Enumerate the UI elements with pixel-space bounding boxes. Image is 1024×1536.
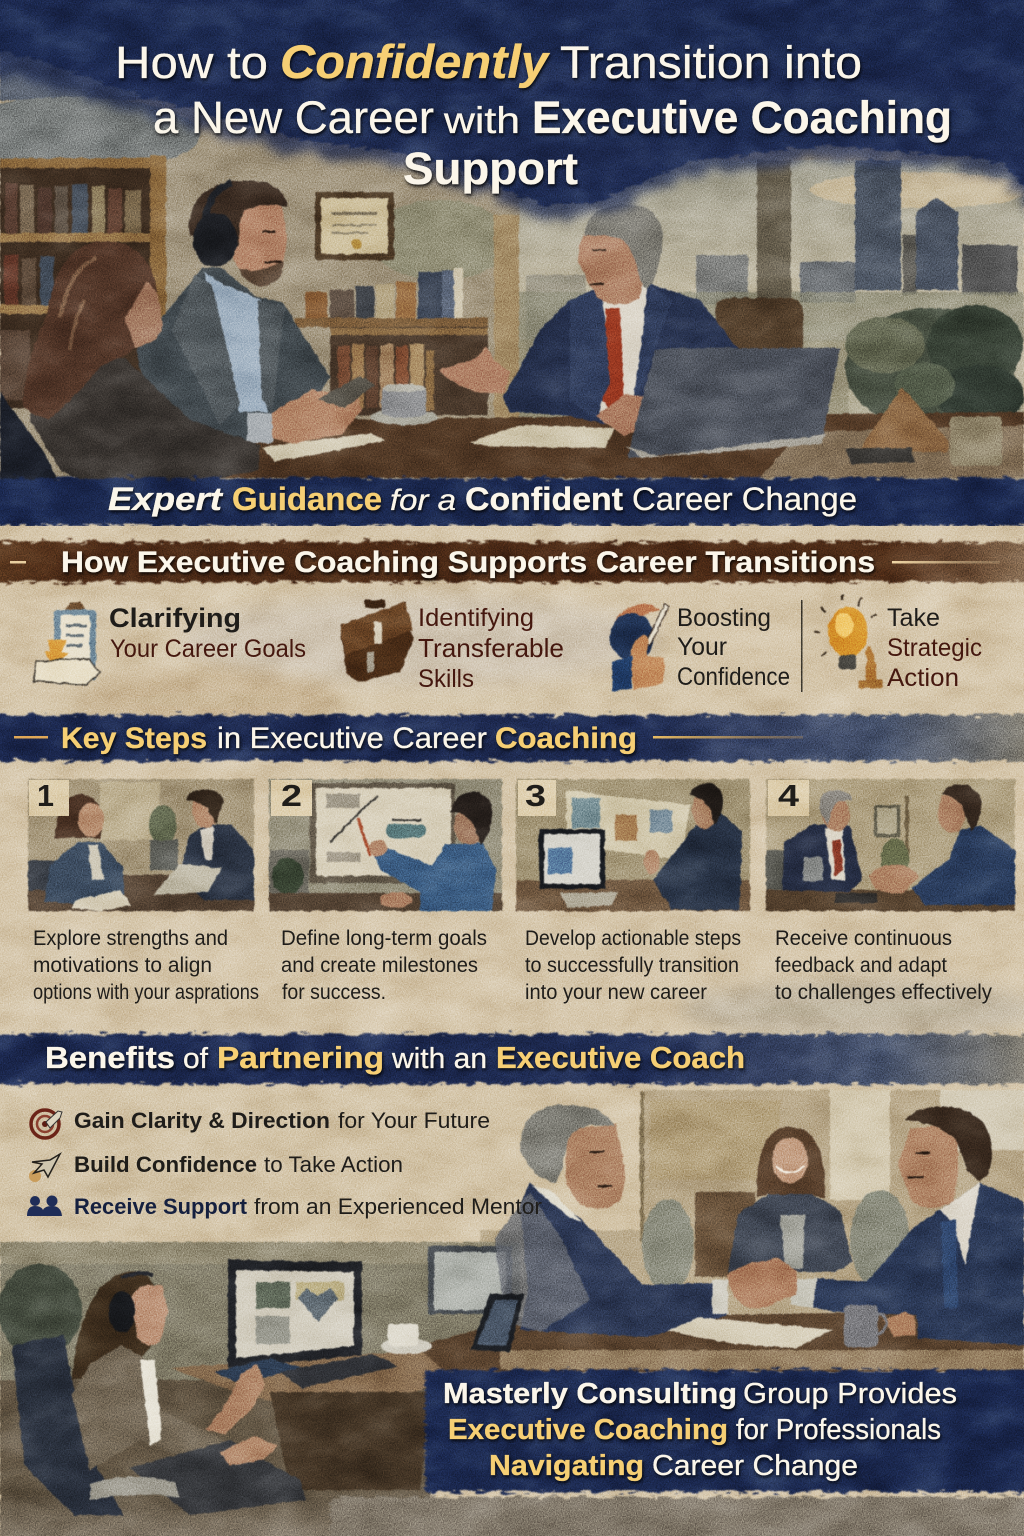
young man in navy suit xyxy=(790,1107,1024,1345)
benefits parchment xyxy=(0,1090,1024,1240)
heading: key steps: Coaching xyxy=(495,722,637,755)
step numbers: 1 xyxy=(37,778,54,813)
hero certificate xyxy=(315,192,394,260)
heading: benefits: of xyxy=(183,1043,209,1075)
hero chair xyxy=(715,298,803,363)
step numbers: 3 xyxy=(525,778,546,813)
hero navy top wash, soft edge xyxy=(0,0,1024,255)
hero wall bookcase xyxy=(295,268,488,415)
support item: take action: Take xyxy=(887,604,940,632)
support item: clarifying xyxy=(109,603,306,663)
title: with xyxy=(443,100,520,141)
benefit 1 xyxy=(31,1108,490,1138)
title xyxy=(115,35,952,194)
header band: coaching supports xyxy=(0,542,1024,582)
older man shaking hands xyxy=(495,1105,728,1337)
hero lower navy band xyxy=(0,478,1024,526)
heading: benefits: Executive Coach xyxy=(496,1040,745,1075)
handshake xyxy=(727,1257,797,1308)
title: a New Career xyxy=(153,92,434,143)
support item: boosting xyxy=(677,604,790,691)
hero navy top wash xyxy=(0,0,1024,240)
step 4 text: feedback and adapt xyxy=(775,954,947,977)
closing statement: Executive Coaching xyxy=(448,1414,728,1446)
benefit 1: for Your Future xyxy=(338,1108,490,1133)
benefits meeting scene xyxy=(0,1090,1024,1536)
hero plant xyxy=(845,305,1024,428)
support item: identifying: Skills xyxy=(418,665,474,693)
hero window and skyline xyxy=(519,158,1024,470)
hero subtitle: Confident xyxy=(465,481,623,517)
icon: light bulb and chess piece xyxy=(814,594,882,688)
support item: clarifying: Clarifying xyxy=(109,603,241,633)
meeting papers and mug xyxy=(667,1305,886,1348)
benefit 3 xyxy=(27,1194,542,1219)
closing statement: Masterly Consulting xyxy=(443,1378,737,1410)
hero subtitle: for a xyxy=(390,484,456,517)
icon: clipboard goals xyxy=(34,602,100,685)
step number tile 4 xyxy=(768,780,809,816)
hero desk papers and cup xyxy=(262,384,615,462)
closing navy panel xyxy=(425,1370,1024,1492)
woman seen from behind xyxy=(0,241,260,500)
step 2 text: and create milestones xyxy=(281,954,478,977)
title: Executive Coaching xyxy=(532,92,952,143)
heading: benefits xyxy=(45,1040,745,1075)
step 1 text: options with your asprations xyxy=(33,981,259,1004)
step 2 text: for success. xyxy=(282,981,386,1004)
step 3 text: into your new career xyxy=(525,981,707,1004)
step 1 text: motivations to align xyxy=(33,954,212,977)
woman at computer with headset xyxy=(12,1271,306,1515)
benefit 1: Gain Clarity & Direction xyxy=(74,1108,330,1133)
benefit 2: to Take Action xyxy=(264,1152,403,1177)
hero subtitle: Expert xyxy=(108,481,224,517)
heading: benefits: with an xyxy=(391,1043,487,1075)
closing statement: for Professionals xyxy=(736,1414,941,1446)
step 1 illustration xyxy=(28,779,254,911)
hero subtitle: Guidance xyxy=(232,481,382,517)
man with headset xyxy=(136,181,375,470)
step 4 text xyxy=(775,927,992,1004)
step 3 text xyxy=(525,927,741,1004)
title: Transition into xyxy=(560,37,862,88)
support item: identifying xyxy=(418,604,564,693)
hero desk xyxy=(170,412,1024,478)
coach in navy suit xyxy=(438,204,745,436)
step 4 text: Receive continuous xyxy=(775,927,952,950)
support item: take action: Action xyxy=(887,664,959,692)
benefit 3: from an Experienced Mentor xyxy=(254,1194,542,1219)
hero wall xyxy=(0,0,1024,500)
step numbers: 2 xyxy=(281,778,302,813)
step number tile 3 xyxy=(518,780,556,816)
bottom left office wall xyxy=(0,1242,520,1382)
closing statement: Navigating xyxy=(489,1450,644,1482)
step number tile 1 xyxy=(29,780,69,816)
step numbers xyxy=(37,778,800,813)
heading: benefits: Partnering xyxy=(217,1040,384,1075)
heading: key steps: in Executive Career xyxy=(217,722,487,755)
benefits band xyxy=(0,1034,1024,1084)
support item: clarifying: Your Career Goals xyxy=(110,635,306,663)
heading: benefits: Benefits xyxy=(45,1040,175,1075)
benefit 2: Build Confidence xyxy=(74,1152,257,1177)
heading: key steps: Key Steps xyxy=(61,722,207,755)
closing statement xyxy=(443,1378,957,1482)
benefit 3: Receive Support xyxy=(74,1194,248,1219)
step 2 text xyxy=(281,927,487,1004)
header band: key steps xyxy=(0,715,1024,761)
icon: confidence gauge and thumb xyxy=(610,604,669,692)
closing statement: Career Change xyxy=(652,1450,858,1482)
hero left bookshelf xyxy=(0,155,166,415)
hero subtitle: Career Change xyxy=(632,481,857,517)
step 2 illustration xyxy=(269,779,502,911)
heading: key steps xyxy=(14,722,803,755)
hero decor triangle and vase xyxy=(845,387,1002,466)
step 3 text: Develop actionable steps xyxy=(525,927,741,950)
step 2 text: Define long-term goals xyxy=(281,927,487,950)
step numbers: 4 xyxy=(778,778,800,813)
step 4 illustration xyxy=(766,779,1015,911)
title: Support xyxy=(403,143,578,194)
support item: take action xyxy=(887,604,982,692)
step 1 text: Explore strengths and xyxy=(33,927,228,950)
heading: how coaching supports: How Executive Coaching Supports Career Transitions xyxy=(61,546,875,579)
benefit 2 xyxy=(29,1152,403,1182)
support item: boosting: Confidence xyxy=(677,663,790,691)
meeting wall xyxy=(480,1090,1024,1330)
support row icons xyxy=(34,594,882,692)
hero subtitle xyxy=(108,481,857,517)
support item: boosting: Your xyxy=(677,633,727,661)
step 4 text: to challenges effectively xyxy=(775,981,992,1004)
step 1 text xyxy=(33,927,259,1004)
icon: rocket xyxy=(29,1154,60,1182)
bottom floor strip xyxy=(330,1497,1024,1536)
step 3 illustration xyxy=(516,779,750,911)
support item: take action: Strategic xyxy=(887,634,982,662)
parchment section xyxy=(0,526,1024,1032)
support item: identifying: Identifying xyxy=(418,604,534,632)
computer monitor with report xyxy=(215,1260,362,1384)
icon: target with rocket xyxy=(31,1110,62,1138)
icon: briefcase xyxy=(340,600,413,682)
icon: mentor people xyxy=(27,1196,62,1216)
title: Confidently xyxy=(280,35,551,88)
number tabs xyxy=(29,780,809,816)
support item: boosting: Boosting xyxy=(677,604,771,632)
hero laptop xyxy=(625,348,840,458)
meeting desk xyxy=(360,1310,1024,1372)
title: How to xyxy=(115,37,268,88)
keyboard, cup and tablet xyxy=(280,1294,524,1388)
support item: identifying: Transferable xyxy=(418,633,564,663)
closing statement: Group Provides xyxy=(743,1378,957,1410)
step number tile 2 xyxy=(271,780,312,816)
hero illustration: coaching meeting xyxy=(0,0,1024,500)
woman at back of table xyxy=(695,1127,852,1277)
step 3 text: to successfully transition xyxy=(525,954,739,977)
